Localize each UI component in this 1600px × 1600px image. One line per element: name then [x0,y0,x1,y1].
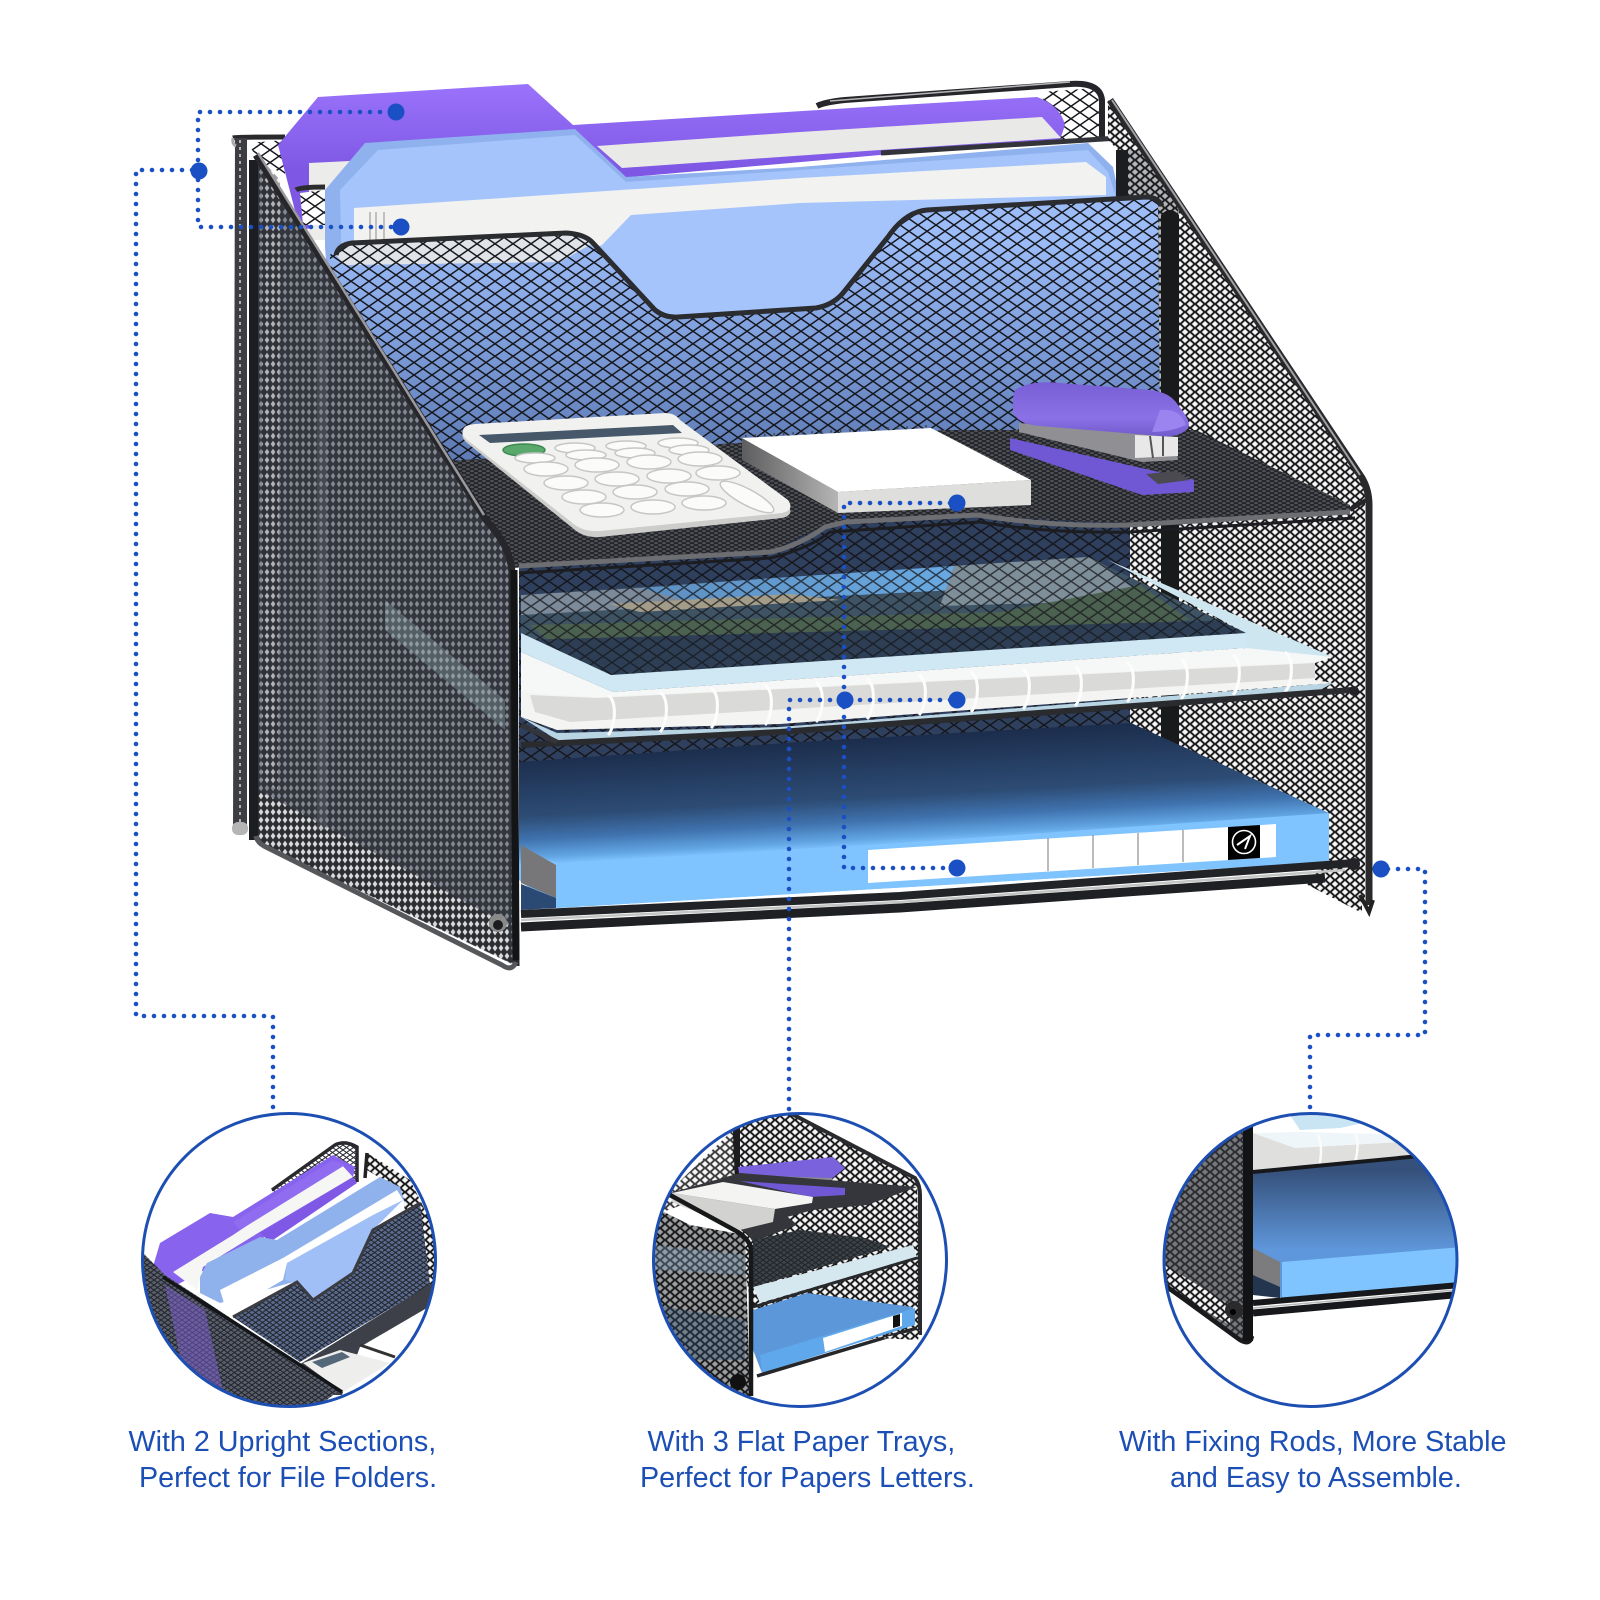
panel: fixing rods detail circle [1160,1112,1462,1406]
notebook [1253,1112,1440,1175]
assembly screw [489,914,507,932]
notepad [742,426,1031,513]
caption: flat paper trays [640,1426,975,1494]
tier two [753,1230,890,1287]
infographic canvas [128,80,1506,1493]
caption: upright sections [128,1426,437,1494]
middle tray rod [521,690,1352,745]
calculator keys [503,438,777,518]
book [753,1293,915,1373]
side mesh [1166,1132,1243,1340]
top shelf tray [430,430,1366,573]
notepad [672,1193,775,1230]
stapler [738,1157,845,1180]
left side mesh panel [256,153,516,968]
bottom fixing rods and rear foot [521,686,1362,927]
caption: flat paper trays: Perfect for Papers Letters. [640,1462,975,1494]
calculator [462,413,790,537]
back frame and corner mesh [233,82,1102,175]
front light-blue file folder [325,129,1120,440]
tablet with landscape screen [521,555,1333,692]
caption: fixing rods: and Easy to Assemble. [1170,1462,1462,1494]
back left mesh [664,1132,735,1212]
left side mesh [144,1254,338,1405]
second divider rail [296,138,1119,225]
calculator [303,1350,390,1392]
left back post [232,138,258,840]
callout: flat trays leader [789,503,950,1110]
binder label with dividers [868,824,1276,883]
panel: flat trays detail circle [650,1113,946,1406]
caption: upright sections: With 2 Upright Sections, [128,1426,436,1458]
left side panel [655,1213,750,1396]
caption: flat paper trays: With 3 Flat Paper Trays, [648,1426,955,1458]
callout: fixing rods leader [1310,869,1425,1112]
blue folder [200,1177,405,1303]
shelf and notepad edge [301,1283,432,1395]
caption: upright sections: Perfect for File Folders. [139,1462,437,1494]
purple stapler [1010,382,1194,495]
purple folder [152,1155,355,1287]
notebook rings [608,652,1291,735]
callout anchor dots [190,104,1390,878]
caption: fixing rods: With Fixing Rods, More Stable [1119,1426,1506,1458]
screw [730,1374,746,1390]
right rim and post [1110,100,1373,912]
lower tier back mesh [519,500,1161,775]
front upright mesh with notch [330,197,1162,520]
callout: upright sections leader [136,112,395,1109]
back purple file folder [278,84,1065,240]
product: mesh desk organizer [232,82,1373,968]
caption: fixing rods [1119,1426,1506,1494]
shelf [670,1173,917,1242]
panel: upright sections detail circle [140,1114,440,1420]
right side mesh panel [1108,100,1365,905]
right side mesh [740,1115,918,1340]
spiral notebook [521,648,1333,742]
calculator screen [479,425,682,443]
rods [1253,1285,1460,1303]
book [1253,1156,1462,1298]
back mesh [272,1143,357,1240]
front mesh panel [233,1203,430,1362]
blue binder book [519,723,1329,910]
